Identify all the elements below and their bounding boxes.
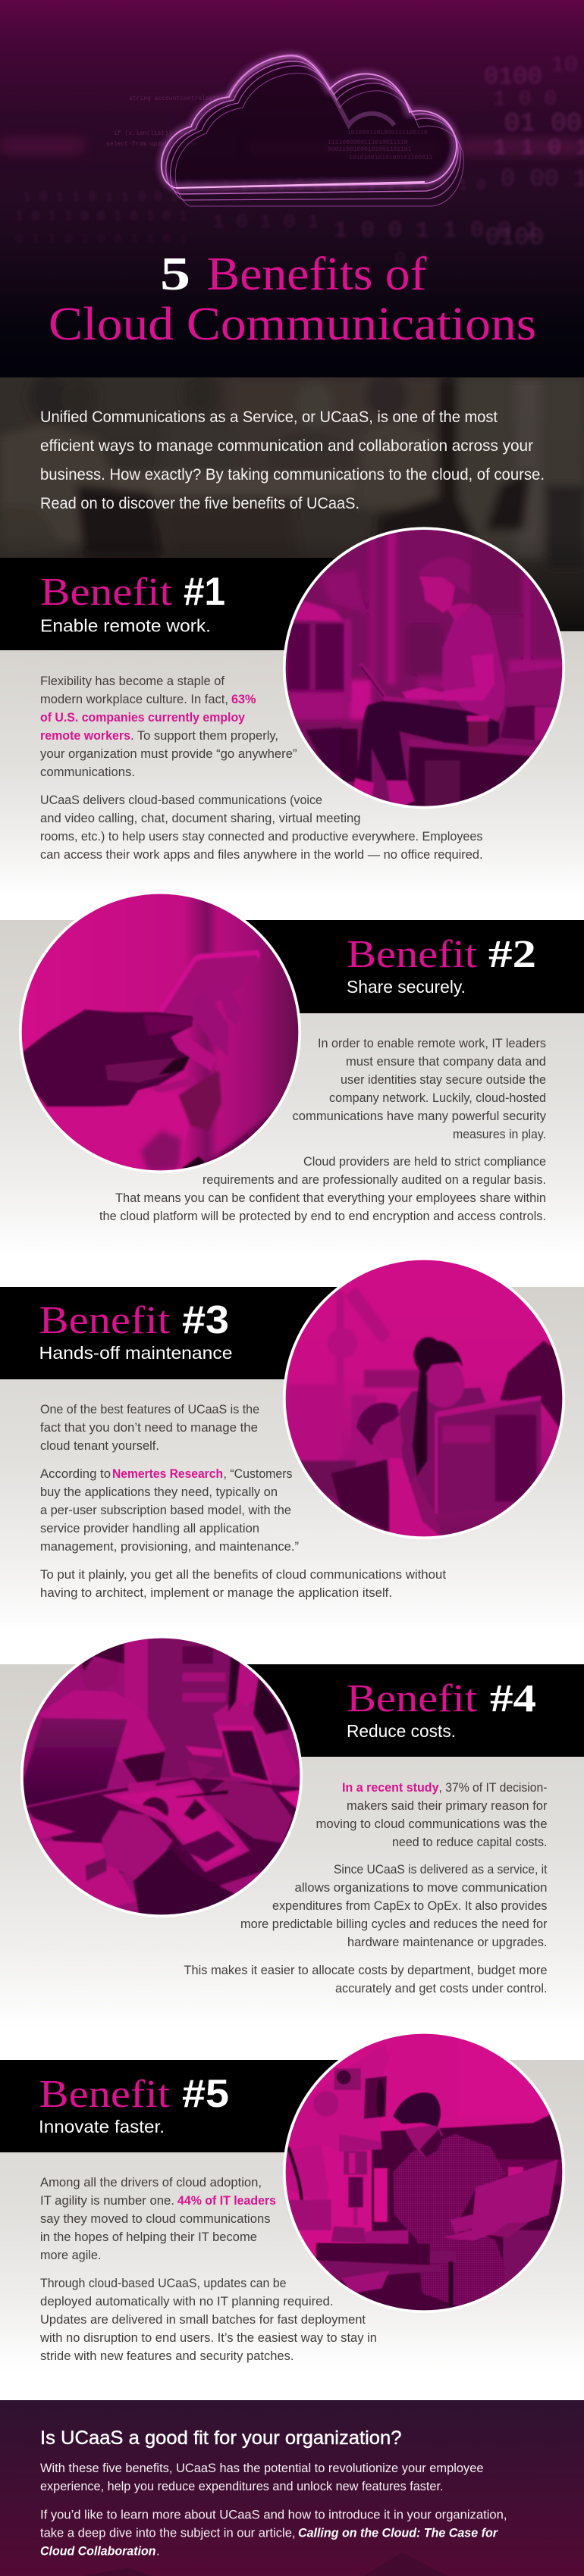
body text: measures in play.	[453, 1128, 546, 1141]
body text: Nemertes Research	[112, 1467, 223, 1481]
binary code backdrop: 0100	[484, 63, 542, 91]
heading: #1	[184, 570, 225, 614]
binary code backdrop: 10	[551, 53, 578, 79]
binary code backdrop: 1 0 1 1 0 0 1 0 1 0 1	[15, 209, 187, 224]
panel: benefit 4	[0, 1639, 584, 1995]
body text: your organization must provide “go anywhere”	[40, 747, 297, 761]
body text: IT agility is number one.	[40, 2194, 174, 2208]
heading: #5	[182, 2072, 229, 2116]
intro text: Unified Communications as a Service, or UCaaS, is one of the most	[40, 408, 498, 426]
panel background	[0, 1664, 584, 2060]
heading: Share securely.	[347, 977, 466, 997]
table	[26, 1777, 301, 1894]
skyline silhouette	[83, 2553, 447, 2576]
binary code backdrop: 0100	[485, 224, 544, 252]
black heading band	[159, 920, 584, 1013]
panel: header: 10101001010100101100011	[349, 155, 433, 161]
body text: moving to cloud communications was the	[316, 1817, 548, 1831]
panel: benefit 1	[0, 527, 584, 870]
body text: must ensure that company data and	[346, 1055, 546, 1069]
panel: header: string accountcontrolsettings	[129, 95, 234, 102]
arm and laptop	[450, 2214, 476, 2233]
standing woman	[400, 1388, 486, 1513]
photo: two women at a monitor	[281, 1254, 569, 1542]
monitor	[435, 1396, 541, 1513]
heading: Benefit	[39, 2073, 171, 2116]
body text: expenditures from CapEx to OpEx. It also provides	[272, 1899, 548, 1913]
heading	[347, 1677, 536, 1741]
closing text	[40, 2462, 507, 2559]
binary code backdrop: 01 00	[504, 110, 582, 139]
dark room	[372, 2114, 565, 2314]
body text: cloud tenant yourself.	[40, 1439, 159, 1453]
body text: say they moved to cloud communications	[40, 2212, 270, 2226]
body text: deployed automatically with no IT planning required.	[40, 2295, 334, 2308]
cup	[468, 721, 488, 747]
body text: remote workers	[40, 729, 130, 743]
binary code backdrop: 1 0 0 1 1 0 1 0 1 0 0 1 1 0 1 0 1 0	[167, 177, 485, 195]
lower fingers	[171, 1034, 216, 1072]
body text	[184, 1781, 548, 1995]
photo: team reviewing tablet charts	[18, 1631, 306, 1919]
man in shirt	[39, 1690, 166, 1765]
panel: header: 1111000000111010011110	[328, 139, 408, 146]
body text: communications have many powerful security	[293, 1110, 547, 1123]
binary code backdrop: 1 0 1 0 1	[212, 211, 319, 233]
body text: . To support them properly,	[130, 729, 278, 743]
title: Cloud Communications	[49, 299, 536, 350]
panel: closing call to action	[0, 2400, 584, 2576]
body text: user identities stay secure outside the	[341, 1073, 546, 1087]
machine arm	[290, 2043, 389, 2152]
black heading band	[161, 1664, 584, 1757]
heading: Benefit	[39, 1299, 171, 1342]
closing text: Cloud Collaboration	[40, 2545, 156, 2559]
binary code backdrop: 1 0 0 1 1 0 0 1	[334, 218, 538, 244]
intro text: Read on to discover the five benefits of UCaaS.	[40, 495, 360, 512]
closing text: With these five benefits, UCaaS has the potential to revolutionize your employee	[40, 2462, 484, 2475]
black heading band	[0, 558, 429, 650]
panel background	[0, 2060, 584, 2400]
body text: To put it plainly, you get all the benefits of cloud communications without	[40, 1568, 446, 1582]
body text: 44% of IT leaders	[177, 2194, 276, 2208]
body text: stride with new features and security patches.	[40, 2349, 294, 2363]
closing text: experience, help you reduce expenditures and unlock new features faster.	[40, 2480, 443, 2493]
body text: fact that you don’t need to manage the	[40, 1421, 258, 1435]
panel: header: select from update stream	[106, 141, 197, 148]
body text: company network. Luckily, cloud-hosted	[329, 1091, 546, 1105]
body text: Among all the drivers of cloud adoption,	[40, 2176, 262, 2189]
closing heading: Is UCaaS a good fit for your organization?	[40, 2427, 402, 2449]
man	[393, 2134, 506, 2306]
body text: Since UCaaS is delivered as a service, it	[334, 1863, 548, 1876]
body text: modern workplace culture. In fact,	[40, 693, 228, 706]
intro text: efficient ways to manage communication and collaboration across your	[40, 437, 533, 455]
body text	[99, 1037, 547, 1223]
body text: service provider handling all application	[40, 1522, 259, 1535]
closing text: Calling on the Cloud: The Case for	[298, 2527, 499, 2540]
body text: In order to enable remote work, IT leaders	[318, 1037, 546, 1050]
body text: a per-user subscription based model, with the	[40, 1504, 291, 1517]
heading	[40, 570, 225, 635]
body text: with no disruption to end users. It’s the easiest way to stay in	[39, 2331, 377, 2345]
black heading band	[0, 1287, 425, 1379]
panel: header: 00011001000101001101101	[328, 146, 412, 153]
small tablet	[217, 1726, 272, 1785]
heading: Benefit	[40, 571, 173, 614]
laptop	[24, 1718, 127, 1807]
panel: benefit 5	[0, 2034, 584, 2363]
closing text: take a deep dive into the subject in our article,	[40, 2527, 296, 2540]
body text: management, provisioning, and maintenance.”	[40, 1540, 299, 1554]
body text	[40, 675, 482, 862]
person	[356, 700, 499, 783]
body text: more agile.	[40, 2249, 102, 2262]
title: 5	[160, 249, 190, 300]
body text: in the hopes of helping their IT become	[40, 2230, 257, 2244]
binary code backdrop	[15, 53, 584, 271]
body text: , “Customers	[223, 1467, 293, 1481]
body text: need to reduce capital costs.	[392, 1836, 548, 1849]
panel: benefit 3	[0, 1260, 584, 1599]
body text: makers said their primary reason for	[347, 1799, 548, 1813]
body text: of U.S. companies currently employ	[40, 711, 246, 725]
heading	[39, 1298, 232, 1363]
body text: rooms, etc.) to help users stay connected and productive everywhere. Employees	[40, 830, 482, 844]
body text: This makes it easier to allocate costs by department, budget more	[184, 1964, 548, 1977]
bench	[504, 667, 564, 705]
binary code backdrop: 1 0 0	[493, 88, 557, 111]
body text: That means you can be confident that everything your employees share within	[115, 1191, 546, 1205]
body text: allows organizations to move communication	[294, 1881, 548, 1895]
body text: According to	[40, 1467, 111, 1481]
glow streaks	[0, 141, 584, 152]
black heading band	[0, 2060, 425, 2152]
panel: header	[0, 0, 584, 377]
closing text: .	[156, 2545, 160, 2559]
panel: benefit 2	[0, 894, 584, 1223]
body text: In a recent study	[342, 1781, 439, 1795]
body text	[40, 1403, 446, 1600]
panel background	[0, 1287, 584, 1664]
body text: , 37% of IT decision-	[438, 1781, 548, 1795]
heading: #3	[182, 1298, 229, 1342]
binary code backdrop: 0 1	[394, 249, 430, 271]
heading: #2	[488, 933, 536, 976]
tablet with charts	[102, 1780, 250, 1872]
body text: the cloud platform will be protected by end to end encryption and access controls.	[99, 1210, 546, 1223]
heading	[39, 2072, 229, 2136]
heading: Benefit	[347, 933, 478, 976]
intro text: business. How exactly? By taking communications to the cloud, of course.	[40, 466, 545, 484]
body text: requirements and are professionally audited on a regular basis.	[203, 1173, 546, 1187]
body text: accurately and get costs under control.	[335, 1982, 548, 1995]
binary code backdrop: 1 0 1 1 0 1 1 0 0 1	[23, 190, 178, 205]
heading	[347, 933, 536, 997]
icon: glowing cloud	[162, 55, 463, 206]
panel: intro	[0, 373, 584, 632]
body text: Through cloud-based UCaaS, updates can be	[40, 2277, 287, 2290]
body text: hardware maintenance or upgrades.	[347, 1936, 548, 1949]
photo: engineer at drill press with laptop	[281, 2028, 569, 2316]
binary code backdrop: 0 1 1 0 1 0 0 1 1 0 1	[15, 232, 187, 247]
body text: can access their work apps and files anywhere in the world — no office required.	[40, 848, 482, 862]
seated woman	[331, 1460, 392, 1532]
heading: Hands-off maintenance	[39, 1343, 232, 1363]
heading: Benefit	[347, 1677, 478, 1720]
heading: #4	[490, 1677, 536, 1720]
intro text	[40, 408, 545, 512]
panel background	[0, 631, 584, 920]
panel: header: 1010001101000111100110	[347, 130, 428, 136]
upper fingers	[198, 1005, 229, 1055]
panel: header: if (x.len(list)) then	[114, 130, 190, 137]
photo: hands holding phone	[17, 888, 305, 1176]
sleeve	[133, 1848, 234, 1917]
photo: woman with laptop	[281, 523, 569, 811]
office photo backdrop	[0, 373, 584, 632]
heading: Innovate faster.	[39, 2117, 165, 2136]
body text	[39, 2176, 377, 2363]
plant	[122, 1752, 165, 1783]
panel background	[0, 920, 584, 1287]
heading: Enable remote work.	[40, 615, 211, 635]
body text: buy the applications they need, typically on	[40, 1485, 278, 1499]
background shelves	[147, 1636, 231, 1777]
title	[49, 249, 536, 350]
phone	[162, 957, 241, 1014]
closing text: If you’d like to learn more about UCaaS and how to introduce it in your organization,	[40, 2509, 507, 2522]
body text: and video calling, chat, document sharing, virtual meeting	[40, 812, 361, 825]
body text: communications.	[40, 765, 135, 779]
woman	[213, 1699, 299, 1785]
body text: Updates are delivered in small batches for fast deployment	[40, 2313, 366, 2327]
body text: more predictable billing cycles and reduces the need for	[240, 1917, 548, 1931]
hands	[102, 1811, 172, 1880]
body text: having to architect, implement or manage the application itself.	[40, 1586, 392, 1600]
bottom hand	[58, 1091, 189, 1170]
vice	[331, 2227, 366, 2243]
body text: Cloud providers are held to strict compliance	[303, 1155, 546, 1169]
body text: UCaaS delivers cloud-based communications (voice	[40, 793, 322, 807]
heading: Reduce costs.	[347, 1721, 456, 1741]
body text: One of the best features of UCaaS is the	[40, 1403, 259, 1416]
dark hand	[22, 1009, 193, 1106]
spindle	[344, 2152, 367, 2174]
title: Benefits of	[206, 249, 427, 300]
body text: 63%	[231, 693, 256, 706]
body text: Flexibility has become a staple of	[40, 675, 224, 688]
laptop	[359, 663, 429, 703]
